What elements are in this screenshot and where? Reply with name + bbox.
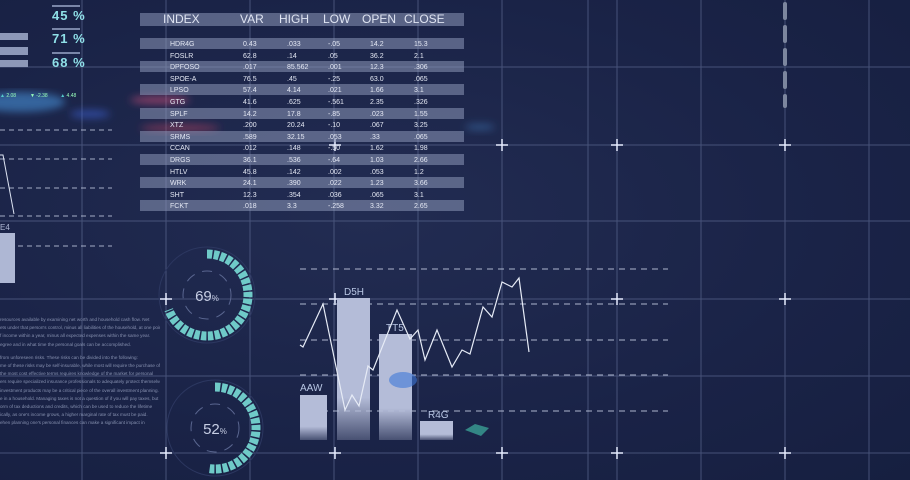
left text block — [0, 317, 160, 425]
table rows: 2.35 — [370, 99, 384, 106]
table rows: .053 — [370, 169, 384, 176]
top-left percentages: 68 % — [52, 55, 86, 70]
table rows — [170, 41, 428, 210]
table rows: SPLF — [170, 111, 188, 118]
table rows: .065 — [370, 192, 384, 199]
bar and line chart: AAW — [300, 383, 323, 394]
table rows: 3.25 — [414, 122, 428, 129]
left text block: the most cost effective terms requires knowledge of the market for personal — [0, 371, 153, 376]
table rows: .067 — [370, 122, 384, 129]
table rows: SPOE-A — [170, 76, 196, 83]
table rows: .022 — [328, 180, 342, 187]
gauge 69%: 69% — [195, 288, 219, 305]
table rows: 3.3 — [287, 203, 297, 210]
top-left percentages — [0, 5, 86, 70]
table rows: -.561 — [328, 99, 344, 106]
table rows: LPSO — [170, 87, 189, 94]
table rows: -.258 — [328, 203, 344, 210]
left line chart: E4 — [0, 223, 10, 232]
table rows: 1.55 — [414, 111, 428, 118]
table header: LOW — [323, 12, 350, 26]
table rows: 57.4 — [243, 87, 257, 94]
table rows: 1.66 — [370, 87, 384, 94]
ticker row: ▲ 2.08 ▼ -2.38 ▲ 4.48 — [0, 93, 76, 99]
table rows: 3.1 — [414, 192, 424, 199]
table header: INDEX — [163, 12, 200, 26]
table rows: 12.3 — [243, 192, 257, 199]
table rows: 3.1 — [414, 87, 424, 94]
table rows: .390 — [287, 180, 301, 187]
table rows: .625 — [287, 99, 301, 106]
table rows: 41.6 — [243, 99, 257, 106]
table rows: 2.65 — [414, 203, 428, 210]
table rows: .018 — [243, 203, 257, 210]
table rows: DPFOSO — [170, 64, 200, 71]
table rows: 32.15 — [287, 134, 305, 141]
bar and line chart: TT5 — [386, 323, 404, 334]
left text block: ically, as one's income grows, a higher marginal rate of tax must be paid. — [0, 412, 148, 417]
table header: HIGH — [279, 12, 309, 26]
left text block: investment products may be a critical piece of the overall investment planning. — [0, 388, 159, 393]
table rows: 1.62 — [370, 145, 384, 152]
table rows: .05 — [328, 53, 338, 60]
table rows: CCAN — [170, 145, 190, 152]
table header — [140, 13, 464, 26]
left text block: from unforeseen risks. These risks can be divided into the following: — [0, 355, 138, 360]
table header: CLOSE — [404, 12, 445, 26]
table rows: .200 — [243, 122, 257, 129]
table rows: 3.32 — [370, 203, 384, 210]
table rows: .053 — [328, 134, 342, 141]
table rows: .45 — [287, 76, 297, 83]
table rows: .14 — [287, 53, 297, 60]
table rows: 36.2 — [370, 53, 384, 60]
table rows: .306 — [414, 64, 428, 71]
table rows: .002 — [328, 169, 342, 176]
bar and line chart: R4G — [428, 410, 449, 421]
table rows: FCKT — [170, 203, 188, 210]
table rows: GTG — [170, 99, 185, 106]
table header: OPEN — [362, 12, 396, 26]
table rows: 24.1 — [243, 180, 257, 187]
left text block: me of these risks may be self-insurable, while most will require the purchase of — [0, 363, 160, 368]
table rows: -.25 — [328, 76, 340, 83]
table rows: 1.23 — [370, 180, 384, 187]
table rows: 20.24 — [287, 122, 305, 129]
left text block: ehen planning one's personal finances can make a significant impact in — [0, 420, 145, 425]
table rows: 1.03 — [370, 157, 384, 164]
table rows: .354 — [287, 192, 301, 199]
data table — [140, 12, 464, 211]
left line chart — [0, 130, 112, 283]
table rows: 85.562 — [287, 64, 308, 71]
table rows: .142 — [287, 169, 301, 176]
left text block: f income within a year, minus all expected expenses within the same year. — [0, 333, 150, 338]
table rows: 14.2 — [370, 41, 384, 48]
table rows: 2.1 — [414, 53, 424, 60]
table rows: .017 — [243, 64, 257, 71]
table rows: .589 — [243, 134, 257, 141]
left text block: orm of tax deductions and credits, which can be used to reduce the lifetime — [0, 404, 152, 409]
table rows: 76.5 — [243, 76, 257, 83]
left text block: resources available by examining net worth and household cash flow. Net — [0, 317, 149, 322]
table rows: -.50 — [328, 145, 340, 152]
table rows: SRMS — [170, 134, 190, 141]
table rows: 62.8 — [243, 53, 257, 60]
table rows: 45.8 — [243, 169, 257, 176]
table rows: .536 — [287, 157, 301, 164]
table rows: 2.66 — [414, 157, 428, 164]
dashed vertical marker — [783, 2, 787, 108]
bar and line chart: D5H — [344, 287, 364, 298]
table rows: -.64 — [328, 157, 340, 164]
gauge 52% — [166, 380, 264, 476]
table rows: 12.3 — [370, 64, 384, 71]
table rows: 1.98 — [414, 145, 428, 152]
table rows: .012 — [243, 145, 257, 152]
table rows: HDR4G — [170, 41, 195, 48]
table rows: -.10 — [328, 122, 340, 129]
line — [300, 278, 529, 410]
table rows: 63.0 — [370, 76, 384, 83]
table rows: .065 — [414, 76, 428, 83]
table rows: SHT — [170, 192, 184, 199]
table rows: .033 — [287, 41, 301, 48]
table rows: .33 — [370, 134, 380, 141]
light streaks — [0, 88, 496, 135]
bars — [300, 298, 453, 440]
table rows: 4.14 — [287, 87, 301, 94]
table rows: 15.3 — [414, 41, 428, 48]
top-left percentages: 71 % — [52, 31, 86, 46]
gauge 52%: 52% — [203, 421, 227, 438]
table rows: WRK — [170, 180, 186, 187]
table rows: 1.2 — [414, 169, 424, 176]
bar and line chart — [300, 268, 668, 440]
table rows: .001 — [328, 64, 342, 71]
table header: VAR — [240, 12, 264, 26]
left text block: egree and in what time the personal goals can be accomplished. — [0, 342, 131, 347]
table rows: 36.1 — [243, 157, 257, 164]
table rows: 0.43 — [243, 41, 257, 48]
table rows: .021 — [328, 87, 342, 94]
table rows: DRGS — [170, 157, 190, 164]
table rows: .036 — [328, 192, 342, 199]
table rows: FOSLR — [170, 53, 193, 60]
left text block: ets under that person's control, minus all liabilities of the household, at one point — [0, 325, 160, 330]
top-left percentages: 45 % — [52, 8, 86, 23]
table rows: HTLV — [170, 169, 187, 176]
table rows: XTZ — [170, 122, 183, 129]
table rows: 3.66 — [414, 180, 428, 187]
table rows: 17.8 — [287, 111, 301, 118]
table rows: 14.2 — [243, 111, 257, 118]
table rows: .023 — [370, 111, 384, 118]
table rows: .326 — [414, 99, 428, 106]
gauge 69% — [158, 246, 256, 344]
table rows: .148 — [287, 145, 301, 152]
table rows: -.85 — [328, 111, 340, 118]
table rows: .065 — [414, 134, 428, 141]
left text block: e in a household. Managing taxes is not a question of if you will pay taxes, but — [0, 396, 158, 401]
table rows: -.05 — [328, 41, 340, 48]
